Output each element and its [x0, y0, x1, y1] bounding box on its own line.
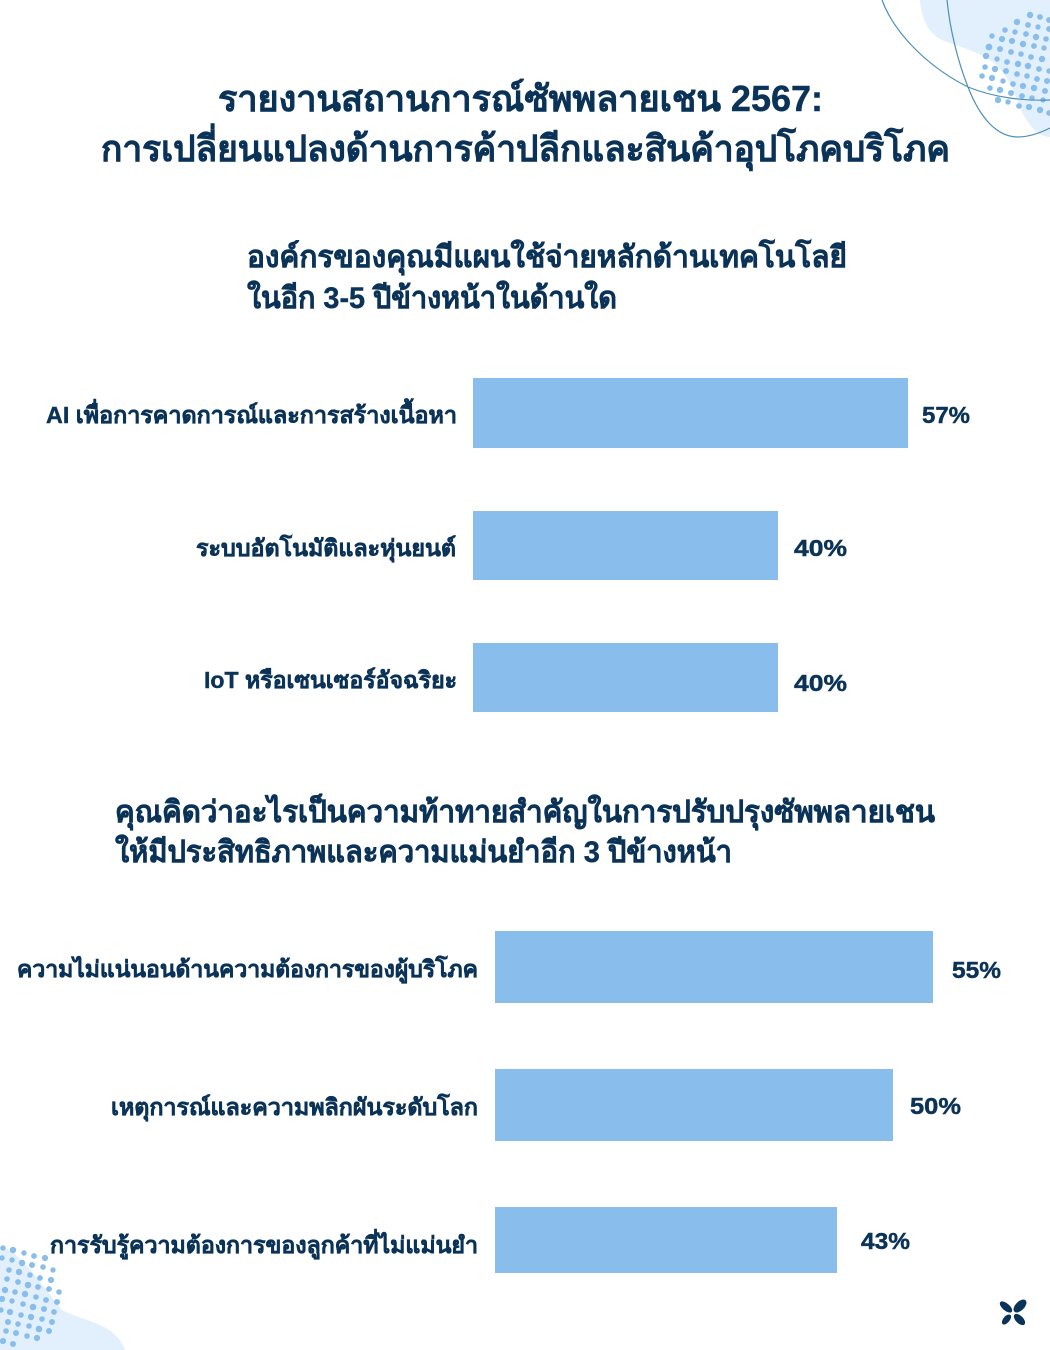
bar row: consumer demand 55% [17, 931, 1001, 1003]
decoration: top right blobs, dots and curves [882, 0, 1050, 137]
bar row: inaccurate demand perception 43%: 43% [861, 1228, 910, 1254]
bar row: IoT 40%: 40% [794, 670, 847, 696]
bar row: global events 50%: เหตุการณ์และความพลิกผันระดับโลก [111, 1093, 478, 1122]
heading: supply chain challenge question [115, 793, 935, 869]
bar row: consumer demand 55%: ความไม่แน่นอนด้านความต้องการของผู้บริโภค [17, 955, 478, 984]
bar row: AI 57%: 57% [922, 402, 970, 428]
bar row: inaccurate demand perception 43% [50, 1207, 910, 1273]
decoration: bottom left blob and dots [0, 1246, 125, 1350]
heading: technology spending question [247, 238, 847, 315]
heading: technology spending question: ในอีก 3-5 ปีข้างหน้าในด้านใด [247, 280, 617, 315]
bar row: inaccurate demand perception 43%: การรับรู้ความต้องการของลูกค้าที่ไม่แม่นยำ [50, 1228, 478, 1260]
title: รายงานสถานการณ์ซัพพลายเชน 2567: [218, 78, 823, 119]
bar row: consumer demand 55%: 55% [952, 957, 1001, 983]
bar row: IoT 40%: IoT หรือเซนเซอร์อัจฉริยะ [204, 667, 457, 693]
bar row: automation 40%: ระบบอัตโนมัติและหุ่นยนต์ [196, 534, 456, 563]
title [101, 78, 950, 172]
icon: logo [998, 1297, 1029, 1327]
bar chart: supply chain challenges [17, 931, 1001, 1273]
bar row: IoT 40% [204, 643, 847, 712]
bar row: AI 57% [46, 378, 970, 448]
bar chart: technology spending [46, 378, 970, 712]
heading: technology spending question: องค์กรของคุณมีแผนใช้จ่ายหลักด้านเทคโนโลยี [247, 238, 847, 276]
bar row: global events 50% [111, 1069, 961, 1141]
heading: supply chain challenge question: คุณคิดว่าอะไรเป็นความท้าทายสำคัญในการปรับปรุงซัพพลายเชน [115, 793, 935, 831]
title: การเปลี่ยนแปลงด้านการค้าปลีกและสินค้าอุปโภคบริโภค [101, 123, 950, 172]
bar row: global events 50%: 50% [910, 1093, 961, 1119]
bar row: automation 40%: 40% [794, 535, 847, 561]
bar row: automation 40% [196, 511, 847, 580]
bar row: AI 57%: AI เพื่อการคาดการณ์และการสร้างเนื้อหา [46, 398, 457, 428]
heading: supply chain challenge question: ให้มีประสิทธิภาพและความแม่นยำอีก 3 ปีข้างหน้า [115, 834, 732, 869]
